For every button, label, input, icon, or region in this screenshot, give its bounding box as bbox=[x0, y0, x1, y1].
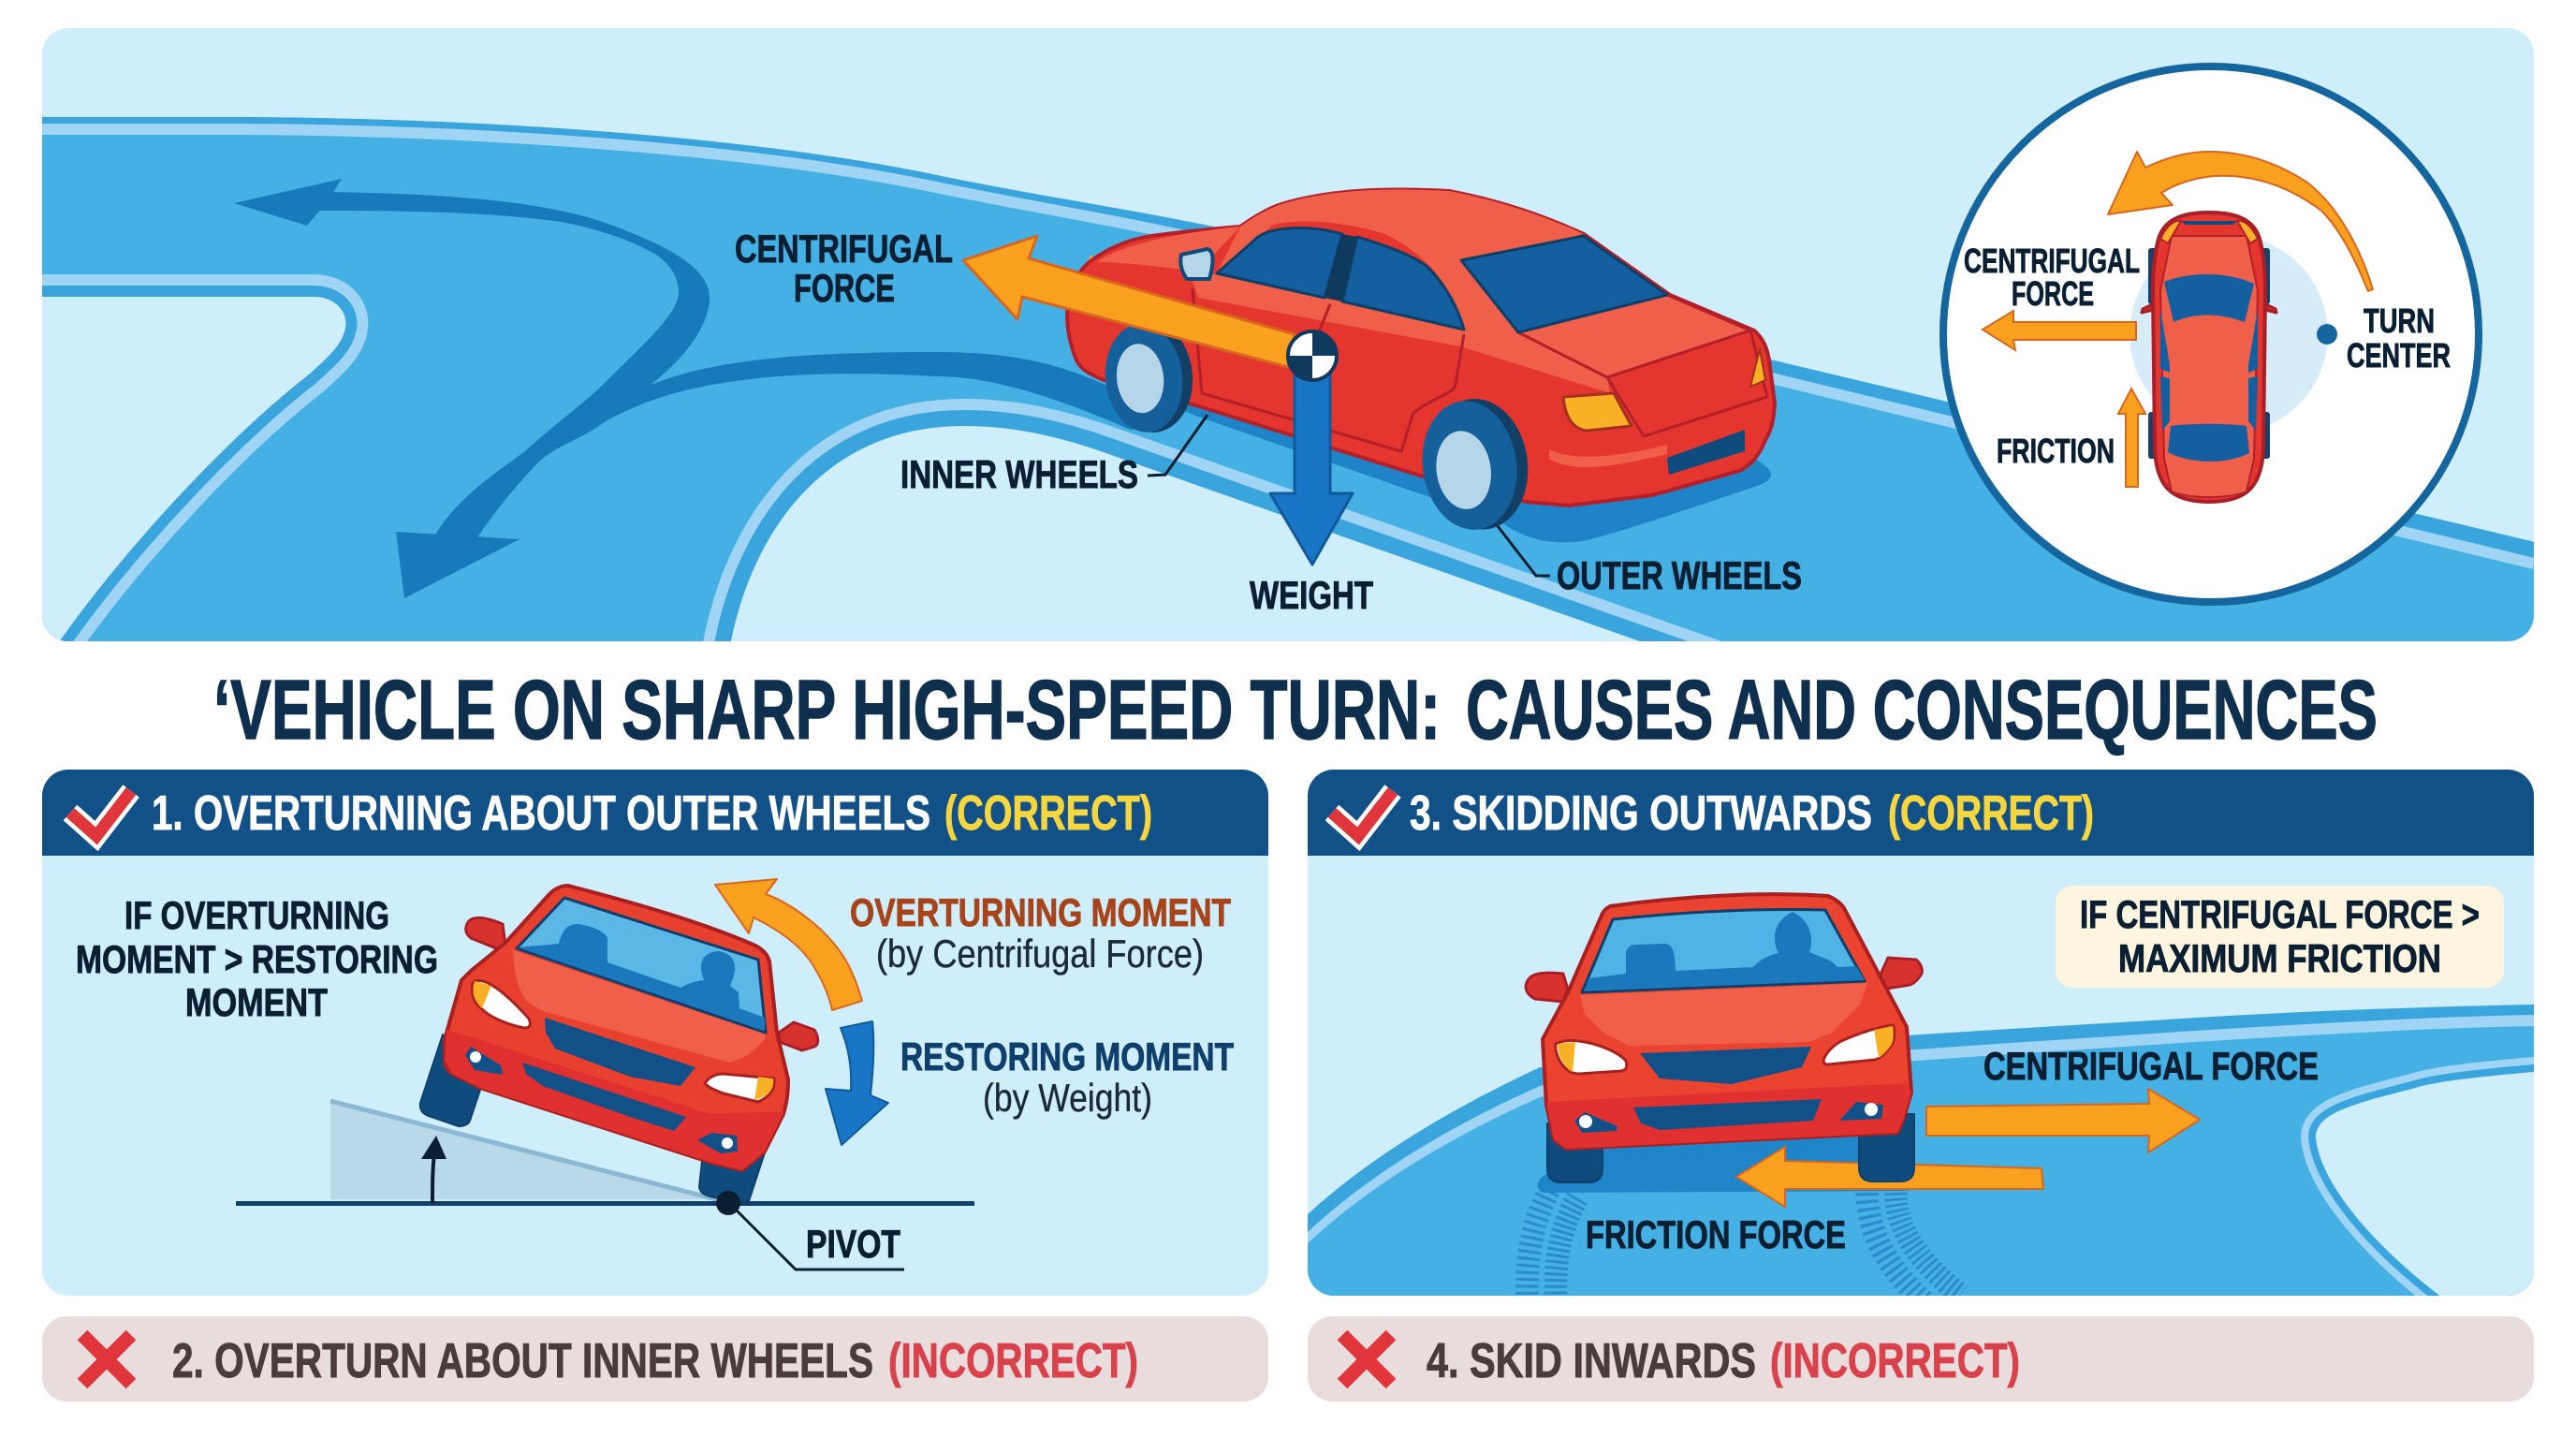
panel header bbox=[42, 770, 1268, 856]
fog lamps bbox=[465, 1047, 503, 1075]
inset: top view diagram bbox=[1943, 66, 2479, 602]
text: restoring moment: RESTORING MOMENT bbox=[900, 1034, 1234, 1078]
text: overturning moment bbox=[850, 890, 1231, 976]
rear face bbox=[1607, 330, 1767, 436]
status: incorrect: (INCORRECT) bbox=[888, 1334, 1138, 1388]
inset labels: CENTRIFUGAL bbox=[1964, 242, 2140, 280]
header text: 3. SKIDDING OUTWARDS bbox=[1410, 786, 1872, 841]
text: overturning moment: OVERTURNING MOMENT bbox=[850, 890, 1231, 934]
ground line bbox=[236, 1201, 974, 1206]
callout: condition bbox=[2056, 886, 2504, 988]
door pillar bbox=[1325, 234, 1357, 301]
text: condition: MOMENT > RESTORING bbox=[76, 937, 438, 981]
car shadow bbox=[1105, 356, 1771, 542]
mirror bbox=[1180, 249, 1213, 279]
inset labels: FORCE bbox=[2012, 274, 2094, 313]
car body bbox=[445, 886, 788, 1170]
inset labels: FRICTION bbox=[1997, 432, 2115, 470]
mirrors bbox=[466, 917, 818, 1050]
arrow: road path arrows bbox=[234, 179, 1133, 598]
tail lights bbox=[1563, 393, 1632, 431]
main red car bbox=[1067, 189, 1775, 536]
car body bbox=[1543, 894, 1911, 1149]
car body bbox=[1067, 189, 1775, 506]
wheels bbox=[420, 1034, 768, 1201]
arrow: weight bbox=[1270, 356, 1353, 565]
title: ‘VEHICLE ON SHARP HIGH-SPEED TURN: bbox=[213, 664, 1441, 757]
label: friction force: FRICTION FORCE bbox=[1586, 1212, 1846, 1256]
curved arrow bbox=[2108, 152, 2373, 291]
header text: 1. OVERTURNING ABOUT OUTER WHEELS bbox=[152, 786, 930, 841]
arrow: friction bbox=[2118, 389, 2145, 487]
front-view car bbox=[1526, 894, 1922, 1182]
inner wheel bbox=[1100, 316, 1198, 437]
headlights bbox=[472, 980, 530, 1028]
label: centrifugal force bbox=[735, 227, 953, 310]
inset labels: CENTER bbox=[2347, 336, 2451, 374]
lower bumper bbox=[445, 1030, 784, 1170]
licence plate bbox=[1667, 430, 1745, 475]
label: centrifugal force: CENTRIFUGAL FORCE bbox=[1983, 1044, 2319, 1088]
status: correct: (CORRECT) bbox=[944, 786, 1152, 841]
door lines bbox=[1193, 288, 1464, 451]
incorrect text: 2. OVERTURN ABOUT INNER WHEELS bbox=[172, 1334, 873, 1388]
callout: condition: IF CENTRIFUGAL FORCE > bbox=[2080, 892, 2480, 936]
hood bbox=[513, 950, 766, 1063]
panel: 2 overturn about inner wheels bbox=[42, 1316, 1268, 1401]
lower bumper bbox=[1546, 1083, 1911, 1149]
arrow: restoring moment bbox=[826, 1021, 888, 1145]
hood bbox=[1580, 983, 1867, 1046]
front headlight bbox=[1076, 255, 1105, 281]
arrow: friction force bbox=[1736, 1147, 2043, 1207]
callout: condition: MAXIMUM FRICTION bbox=[2118, 936, 2441, 980]
panel road bbox=[1308, 1005, 2546, 1311]
label: inner wheels bbox=[900, 415, 1208, 496]
panel header bbox=[1308, 770, 2534, 856]
mirrors bbox=[1526, 958, 1922, 1002]
text: restoring moment: (by Weight) bbox=[983, 1076, 1152, 1120]
label: outer wheels: OUTER WHEELS bbox=[1557, 553, 1802, 597]
status: correct: (CORRECT) bbox=[1888, 786, 2094, 841]
wheels bbox=[1547, 1114, 1914, 1182]
status: incorrect: (INCORRECT) bbox=[1770, 1334, 2020, 1388]
text: overturning moment: (by Centrifugal Force) bbox=[876, 932, 1204, 976]
icon: check mark inner bbox=[1332, 791, 1393, 836]
text: condition: MOMENT bbox=[185, 980, 328, 1024]
arrow: centrifugal force bbox=[1983, 311, 2136, 350]
icon: cross bbox=[82, 1335, 131, 1384]
bumper highlight bbox=[1549, 445, 1667, 467]
grilles bbox=[1640, 1047, 1811, 1084]
car roof and hood highlights bbox=[1217, 189, 1584, 332]
arrow: overturning moment bbox=[715, 879, 862, 1010]
incorrect text: 4. SKID INWARDS bbox=[1427, 1334, 1756, 1388]
panel: 1 overturning about outer wheels bbox=[42, 770, 1268, 1296]
icon: check mark bbox=[1332, 791, 1393, 836]
tilted car bbox=[420, 886, 818, 1201]
car shadow bbox=[1537, 1128, 1910, 1193]
panel: 4 skid inwards bbox=[1308, 1316, 2534, 1401]
pivot marker: PIVOT bbox=[806, 1222, 900, 1266]
icon: cross bbox=[1342, 1335, 1391, 1384]
inset labels bbox=[1964, 242, 2451, 470]
panel: 3 skidding outwards bbox=[1308, 770, 2546, 1311]
top-view car bbox=[2142, 213, 2276, 502]
fog lamps bbox=[1574, 1112, 1617, 1133]
outer wheel bbox=[1414, 392, 1536, 536]
trunk bbox=[1518, 295, 1750, 377]
arrow: centrifugal force bbox=[1926, 1089, 2200, 1152]
text: condition bbox=[76, 893, 438, 1024]
passengers bbox=[518, 924, 765, 1031]
icon: check mark inner bbox=[70, 791, 131, 836]
label: outer wheels bbox=[1498, 526, 1802, 597]
inset labels: TURN bbox=[2364, 301, 2435, 340]
label: inner wheels: INNER WHEELS bbox=[900, 452, 1138, 496]
headlights bbox=[1556, 1040, 1627, 1074]
label: weight: WEIGHT bbox=[1250, 573, 1373, 617]
label: centrifugal force: FORCE bbox=[794, 266, 895, 310]
grilles bbox=[545, 1018, 695, 1086]
label: centrifugal force: CENTRIFUGAL bbox=[735, 227, 953, 271]
passengers bbox=[1585, 912, 1865, 990]
text: condition: IF OVERTURNING bbox=[124, 893, 389, 937]
centre of gravity marker bbox=[1288, 331, 1337, 380]
windshield bbox=[1582, 909, 1865, 992]
text: restoring moment bbox=[900, 1034, 1234, 1120]
icon: check mark bbox=[70, 791, 131, 836]
tilt wedge bbox=[330, 1101, 716, 1199]
windows bbox=[1217, 228, 1667, 332]
panel: top road scene bbox=[42, 28, 2534, 707]
pivot marker bbox=[716, 1191, 904, 1269]
arrow: centrifugal force bbox=[963, 236, 1295, 367]
turn centre dot bbox=[2317, 324, 2337, 345]
windshield bbox=[517, 898, 766, 1033]
road surface with curves bbox=[42, 117, 2534, 641]
turn halo bbox=[2130, 235, 2328, 433]
small lift arrow bbox=[421, 1136, 446, 1203]
